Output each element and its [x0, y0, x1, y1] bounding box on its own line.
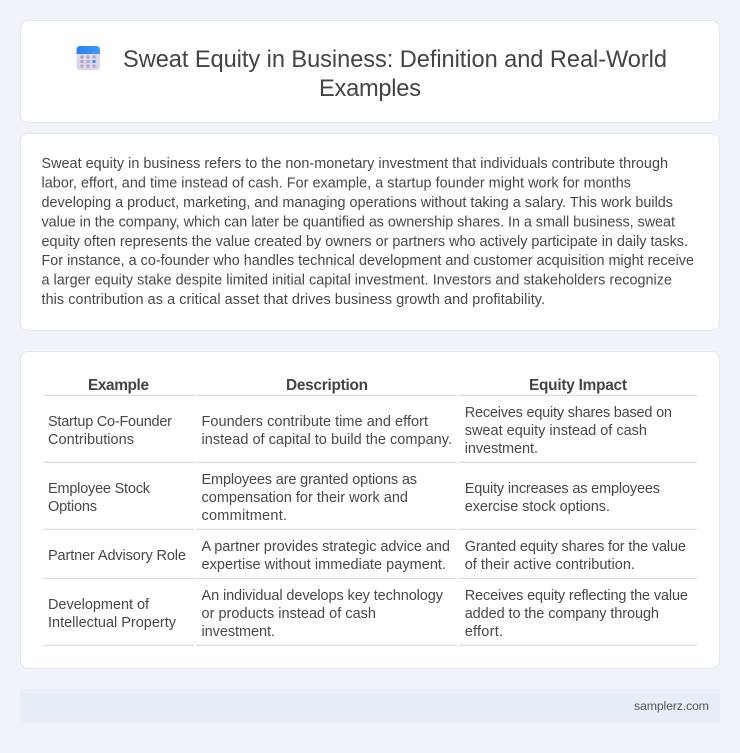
- title: Sweat Equity in Business: Definition and Real-World: [123, 47, 667, 73]
- table row: startup co-founder contributions: investment.: [465, 441, 538, 457]
- text block: definition paragraph: developing a product, marketing, and managing operations without taking a salary. This work builds: [42, 195, 673, 211]
- panel: examples table: [20, 352, 720, 668]
- table row: employee stock options: exercise stock options.: [465, 499, 610, 515]
- text block: definition paragraph: a larger equity stake despite limited initial capital investment. Investors and stakeholders recognize: [42, 273, 672, 289]
- footer: [20, 689, 720, 723]
- table row: employee stock options: commitment.: [202, 508, 287, 524]
- table row: startup co-founder contributions: Contributions: [48, 432, 134, 448]
- table row: employee stock options: Options: [48, 499, 97, 515]
- table row: development of intellectual property: Receives equity reflecting the value: [465, 588, 688, 604]
- table header: [88, 377, 627, 394]
- table row: development of intellectual property: effort.: [465, 624, 503, 640]
- text block: definition paragraph: value in the company, which can later be quantified as ownership shares. In a small business, sweat: [42, 214, 675, 230]
- footer: samplerz.com: [634, 699, 709, 713]
- panel: title card: [20, 20, 720, 122]
- text block: definition paragraph: Sweat equity in business refers to the non-monetary investment that individuals contribute through: [42, 156, 668, 172]
- table header: Description: [286, 377, 368, 394]
- table row: development of intellectual property: [48, 588, 688, 640]
- panel: definition text: [20, 134, 720, 330]
- table row: partner advisory role: Granted equity shares for the value: [465, 539, 686, 555]
- table row: development of intellectual property: investment.: [202, 624, 275, 640]
- table row: development of intellectual property: or products instead of cash: [202, 606, 376, 622]
- table row: employee stock options: compensation for their work and: [202, 490, 408, 506]
- table row: employee stock options: Employees are granted options as: [202, 472, 417, 488]
- text block: definition paragraph: equity often represents the value created by owners or partners who actively participate in daily tasks.: [42, 234, 688, 250]
- table row: development of intellectual property: An individual develops key technology: [202, 588, 444, 604]
- table header: Example: [88, 377, 149, 394]
- table row: startup co-founder contributions: Startup Co-Founder: [48, 414, 172, 430]
- table row: startup co-founder contributions: Receives equity shares based on: [465, 405, 672, 421]
- table row: employee stock options: [48, 472, 660, 524]
- table row: partner advisory role: [48, 539, 686, 573]
- table row: partner advisory role: expertise without immediate payment.: [202, 557, 446, 573]
- table row: partner advisory role: A partner provides strategic advice and: [202, 539, 450, 555]
- table row: development of intellectual property: Intellectual Property: [48, 615, 177, 631]
- table row: startup co-founder contributions: sweat equity instead of cash: [465, 423, 647, 439]
- table row: development of intellectual property: Development of: [48, 597, 150, 613]
- table row: employee stock options: Employee Stock: [48, 481, 151, 497]
- table row: startup co-founder contributions: Founders contribute time and effort: [202, 414, 428, 430]
- table row: employee stock options: Equity increases as employees: [465, 481, 660, 497]
- text block: definition paragraph: this contribution as a critical asset that drives business growth and profitability.: [42, 292, 545, 308]
- table header: Equity Impact: [529, 377, 627, 394]
- text block: definition paragraph: For instance, a co-founder who handles technical development and customer acquisition might receive: [42, 253, 694, 269]
- table row: startup co-founder contributions: instead of capital to build the company.: [202, 432, 452, 448]
- table row: development of intellectual property: added to the company through: [465, 606, 659, 622]
- text block: definition paragraph: labor, effort, and time instead of cash. For example, a startup founder might work for months: [42, 175, 631, 191]
- title: Examples: [319, 76, 421, 102]
- table row: startup co-founder contributions: [48, 405, 672, 457]
- table row: partner advisory role: of their active contribution.: [465, 557, 635, 573]
- table row: partner advisory role: Partner Advisory Role: [48, 548, 186, 564]
- icon: calendar: [76, 46, 100, 70]
- text block: definition paragraph: [42, 156, 694, 308]
- title: [123, 47, 667, 102]
